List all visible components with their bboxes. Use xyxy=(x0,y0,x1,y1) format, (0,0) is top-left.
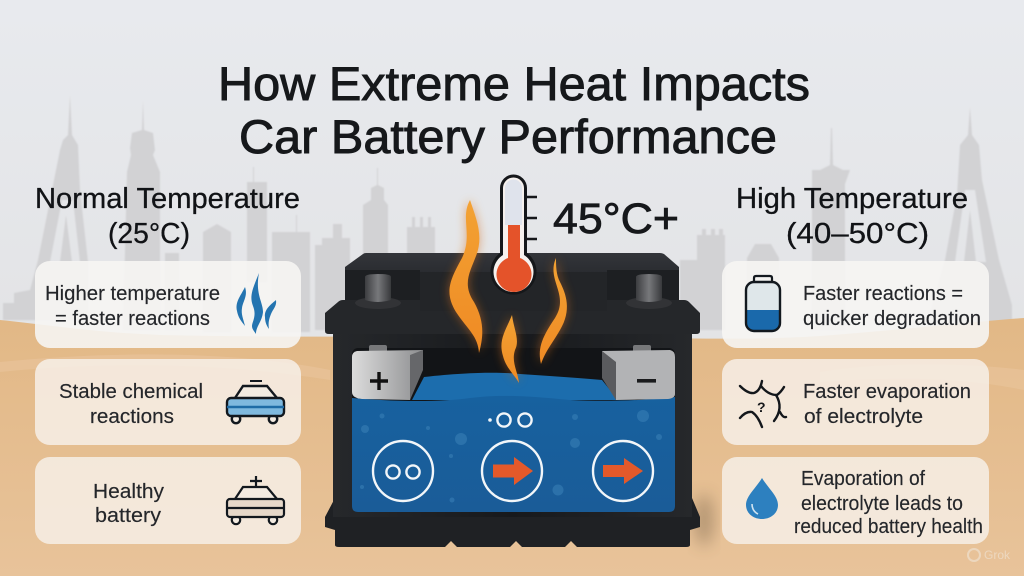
temperature label: 45°C+ xyxy=(553,195,679,243)
heading: high temperature: High Temperature xyxy=(736,182,968,214)
thermometer ticks xyxy=(526,197,537,239)
terminal recesses xyxy=(345,270,679,302)
card: faster evaporation: of electrolyte xyxy=(804,406,923,428)
flame left xyxy=(449,200,482,353)
icon: cracked lines xyxy=(740,381,786,427)
title: How Extreme Heat Impacts xyxy=(218,57,810,110)
battery center block xyxy=(420,272,607,311)
panel: normal temperature cards xyxy=(35,261,301,544)
card: reduced battery health: reduced battery health xyxy=(794,516,983,538)
electrolyte liquid xyxy=(352,396,675,512)
card: stable chemical reactions: reactions xyxy=(90,406,174,428)
battery casing xyxy=(333,333,692,517)
battery window xyxy=(352,348,675,512)
icon: cracked lines: ? xyxy=(757,399,766,415)
card: healthy battery: Healthy xyxy=(93,481,164,503)
card: higher temperature: = faster reactions xyxy=(55,308,210,330)
right post xyxy=(626,274,672,309)
card: faster reactions: quicker degradation xyxy=(803,308,981,330)
top ions xyxy=(488,413,532,427)
watermark xyxy=(968,548,1011,562)
card: higher temperature: Higher temperature xyxy=(45,283,220,305)
heading: high temperature xyxy=(736,182,968,249)
card: reduced battery health: electrolyte leads to xyxy=(801,493,963,515)
thermometer xyxy=(491,174,537,295)
left post xyxy=(355,274,401,309)
card: stable chemical reactions: Stable chemical xyxy=(59,381,203,403)
heading: normal temperature xyxy=(35,182,300,249)
card: faster reactions xyxy=(722,261,989,348)
card: faster reactions: Faster reactions = xyxy=(803,283,963,305)
flame right xyxy=(540,258,567,364)
card: faster evaporation: Faster evaporation xyxy=(803,381,971,403)
card: higher temperature xyxy=(35,261,301,348)
card: faster evaporation xyxy=(722,359,989,445)
card: healthy battery xyxy=(35,457,301,544)
battery xyxy=(325,253,713,547)
card: stable chemical reactions xyxy=(35,359,301,445)
circle: arrow one xyxy=(482,441,542,501)
desert sand xyxy=(0,318,1024,576)
reaction circles row xyxy=(373,413,653,501)
title xyxy=(218,57,810,163)
skyline silhouette xyxy=(3,95,1012,332)
icon: blue car xyxy=(227,381,284,423)
circle: ions xyxy=(373,441,433,501)
thermometer body xyxy=(491,174,537,295)
panel: high temperature cards xyxy=(722,261,989,544)
card: reduced battery health: Evaporation of xyxy=(801,468,925,490)
icon: half-full battery jar xyxy=(746,276,780,331)
icon: water drop xyxy=(746,478,778,519)
title: Car Battery Performance xyxy=(239,110,777,163)
battery ground shadow xyxy=(695,494,713,546)
electrolyte back surface xyxy=(412,373,618,400)
battery lid lower xyxy=(325,300,700,334)
battery base xyxy=(325,498,700,547)
thermometer mercury xyxy=(496,225,532,292)
heading: normal temperature: (25°C) xyxy=(108,217,190,249)
battery lid upper xyxy=(345,253,679,302)
heading: normal temperature: Normal Temperature xyxy=(35,182,300,214)
heading: high temperature: (40–50°C) xyxy=(786,217,929,249)
right cell minus xyxy=(602,345,675,400)
card: healthy battery: battery xyxy=(95,505,161,527)
card: reduced battery health xyxy=(722,457,989,544)
circle: arrow two xyxy=(593,441,653,501)
left cell plus xyxy=(352,345,423,400)
icon: heat waves xyxy=(237,273,276,334)
bubbles xyxy=(360,410,662,502)
heat flames xyxy=(449,200,567,383)
icon: outline car xyxy=(227,476,284,524)
watermark: Grok xyxy=(984,548,1011,562)
flame centre xyxy=(501,315,519,383)
